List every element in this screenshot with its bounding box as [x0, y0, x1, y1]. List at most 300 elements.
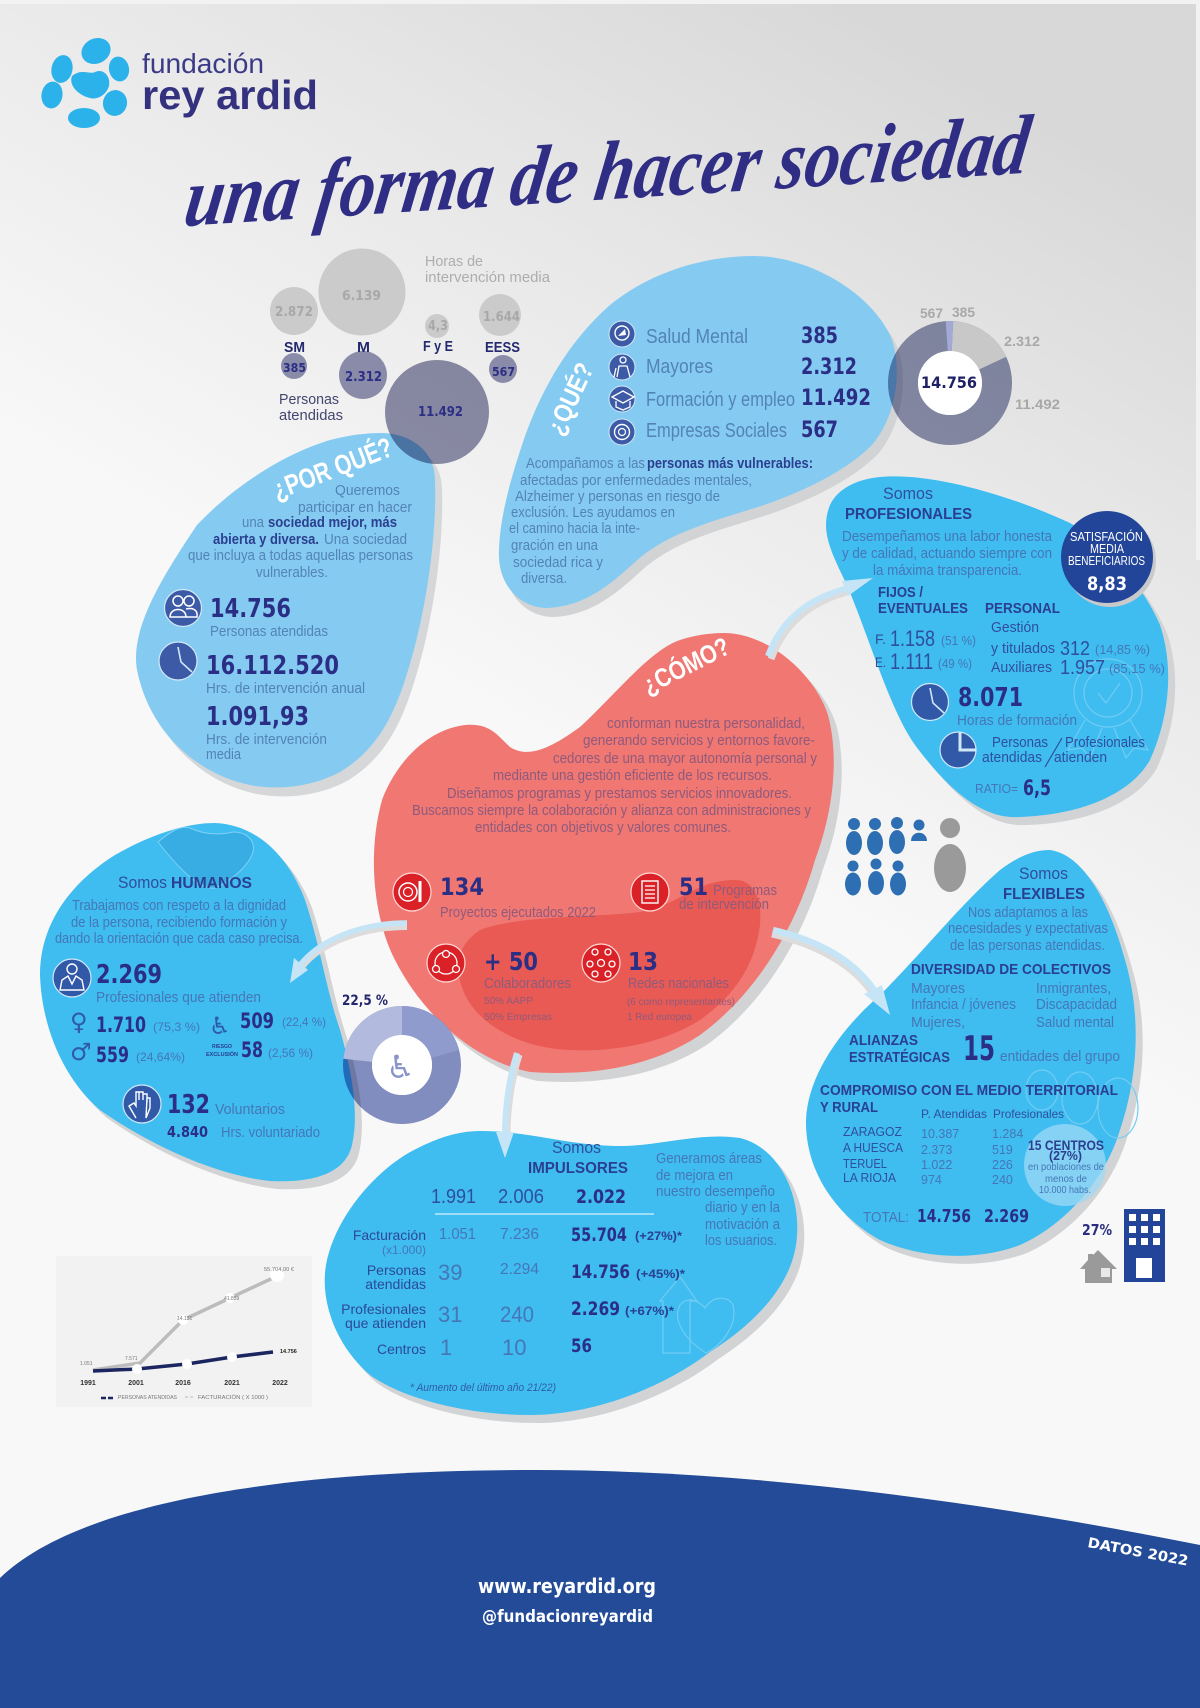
- table: evolution by year: que atienden: [345, 1315, 426, 1331]
- bubble chart: hours and people by area: 2.312: [345, 370, 382, 385]
- stat: women: [70, 1008, 200, 1037]
- panel: flexibles: [806, 850, 1143, 1264]
- stat: alianzas estratégicas: ALIANZAS: [849, 1033, 918, 1049]
- bubble chart: hours and people by area: 1.644: [483, 310, 520, 325]
- text: ratio: Profesionales: [1065, 735, 1145, 751]
- line chart: personas atendidas y facturación: 2022: [272, 1380, 288, 1387]
- icon: colaboradores: [427, 944, 465, 982]
- donut chart: 22,5 % discapacidad: 22,5 %: [342, 993, 388, 1009]
- table: evolution by year: 2.006: [498, 1186, 544, 1208]
- callout: 15 centros: 10.000 habs.: [1039, 1184, 1091, 1196]
- heading: somos flexibles: Somos: [1019, 864, 1068, 883]
- row: mayores: 2.312: [801, 355, 857, 380]
- stat: 2.269 profesionales: 2.269: [96, 960, 162, 990]
- text: humanos description: [55, 898, 303, 947]
- text: por qué description: Queremos: [335, 483, 400, 499]
- text: profesionales description: Desempeñamos una labor honesta: [842, 529, 1053, 545]
- stat: 1.091,93 horas media: 1.091,93: [206, 702, 309, 732]
- stats: personal: PERSONAL: [985, 601, 1060, 617]
- panel: profesionales: [826, 476, 1175, 825]
- line chart: personas atendidas y facturación: 55.704,00 €: [264, 1267, 294, 1273]
- text: cómo description: generando servicios y entornos favore-: [583, 733, 815, 749]
- table: evolution by year: atendidas: [365, 1276, 426, 1292]
- text: cómo description: Diseñamos programas y prestamos servicios innovadores.: [447, 786, 792, 802]
- table: evolution by year: 2.269: [571, 1298, 620, 1320]
- table: evolution by year: 10: [502, 1335, 526, 1360]
- heading: somos impulsores: IMPULSORES: [528, 1160, 628, 1177]
- stats: personal: 312: [1060, 638, 1090, 660]
- heading: somos impulsores: [528, 1138, 628, 1177]
- stat: 16.112.520 horas: [206, 651, 365, 697]
- stats: personal: Auxiliares: [991, 660, 1052, 676]
- line chart: personas atendidas y facturación: 1991: [80, 1380, 96, 1387]
- stat: risk of exclusion: EXCLUSIÓN: [206, 1050, 238, 1058]
- heading: somos flexibles: [1003, 864, 1085, 903]
- stat: 13 redes: 1 Red europea: [627, 1012, 692, 1023]
- list: diversidad de colectivos: Infancia / jóvenes: [911, 997, 1016, 1013]
- text: impulsores description: los usuarios.: [705, 1233, 777, 1249]
- arrow: to flexibles: [772, 930, 890, 1015]
- bubble chart: hours and people by area: intervención media: [425, 270, 551, 286]
- stats: fijos y eventuales: EVENTUALES: [878, 601, 968, 617]
- stat: 14.756 personas: 14.756: [210, 594, 291, 624]
- table: evolution by year: 2.294: [500, 1261, 539, 1278]
- stat: voluntarios: Hrs. voluntariado: [221, 1125, 320, 1141]
- icon: mayores: [609, 354, 635, 380]
- stat: disability: [209, 1009, 326, 1040]
- line chart: personas atendidas y facturación: FACTURACIÓN ( X 1000 ): [198, 1394, 268, 1401]
- table: compromiso territorial: 240: [992, 1173, 1013, 1187]
- bubble chart: hours and people by area: 2.872: [275, 305, 313, 320]
- icon: 27% home and building: 27%: [1082, 1221, 1112, 1239]
- icon: proyectos: [393, 873, 431, 911]
- title: una forma de hacer sociedad: una forma de hacer sociedad: [179, 98, 1038, 245]
- table: evolution by year: 31: [438, 1302, 462, 1327]
- bubble chart: hours and people by area: Horas de: [425, 254, 483, 270]
- logo: fundación rey ardid: rey ardid: [142, 72, 318, 118]
- line chart: personas atendidas y facturación: 41.859: [224, 1296, 240, 1302]
- text: qué description: Acompañamos a las: [526, 456, 645, 472]
- heading: somos profesionales: PROFESIONALES: [845, 506, 972, 523]
- donut chart: personas por área: [903, 304, 1060, 430]
- heading: cómo: ¿CÓMO?: [637, 631, 734, 700]
- badge: satisfacción media beneficiarios: SATISFACIÓN: [1070, 529, 1143, 544]
- donut chart: 22,5 % discapacidad: ♿: [386, 1048, 415, 1086]
- stat: women: (75,3 %): [153, 1020, 200, 1034]
- table: evolution by year: Personas: [367, 1262, 426, 1278]
- row: salud mental: [646, 324, 838, 349]
- badge: satisfacción media beneficiarios: 8,83: [1087, 573, 1127, 595]
- table: compromiso territorial: 519: [992, 1143, 1013, 1157]
- bubble: formación y empleo personas: 11.492: [418, 405, 463, 420]
- stats: personal: (85,15 %): [1109, 661, 1165, 676]
- text: ratio: 6,5: [1023, 776, 1051, 800]
- bubble chart: hours and people by area: 385: [283, 361, 306, 375]
- list: diversidad de colectivos: Discapacidad: [1036, 997, 1117, 1013]
- table: evolution by year: 39: [438, 1260, 462, 1285]
- stat: 134 proyectos: 134: [440, 873, 484, 901]
- text: por qué description: abierta y diversa.: [213, 532, 319, 548]
- heading: por qué: ¿POR QUÉ?: [268, 432, 397, 506]
- stat: men: 559: [96, 1043, 129, 1067]
- donut chart: personas por área: 11.492: [1015, 396, 1060, 412]
- panel: qué: [499, 256, 903, 617]
- text: impulsores description: Generamos áreas: [656, 1151, 762, 1167]
- callout: 15 centros: [1024, 1124, 1106, 1206]
- text: flexibles description: Nos adaptamos a las: [968, 905, 1088, 921]
- stat: disability: (22,4 %): [282, 1015, 326, 1029]
- stat: +50 colaboradores: [484, 947, 571, 1023]
- icon: empresas sociales: [609, 419, 635, 445]
- callout: 15 centros: (27%): [1049, 1148, 1082, 1163]
- stats: personal: y titulados: [991, 641, 1055, 657]
- donut chart: personas por área: 567: [920, 305, 943, 321]
- table: compromiso territorial: 1.284: [992, 1127, 1023, 1141]
- table: compromiso territorial: LA RIOJA: [843, 1170, 896, 1185]
- text: por qué description: participar en hacer: [298, 500, 412, 516]
- text: ratio: Personas: [992, 735, 1048, 751]
- text: flexibles description: de las personas atendidas.: [950, 938, 1105, 954]
- stats: fijos y eventuales: F.: [875, 631, 886, 647]
- stat: women: 1.710: [96, 1013, 146, 1037]
- text: por qué description: una: [242, 515, 265, 531]
- text: ratio: atendidas: [982, 750, 1042, 766]
- stat: 8.071 horas de formación: 8.071: [958, 683, 1023, 713]
- stat: 1.091,93 horas media: Hrs. de intervención: [206, 732, 327, 748]
- heading: somos profesionales: Somos: [883, 484, 933, 503]
- stat: men: (24,64%): [136, 1050, 185, 1064]
- table: evolution by year: [341, 1186, 685, 1360]
- stat: 1.091,93 horas media: media: [206, 747, 242, 763]
- row: mayores: Mayores: [646, 356, 713, 378]
- table: compromiso territorial: 10.387: [921, 1127, 959, 1141]
- stats: fijos y eventuales: (49 %): [938, 656, 972, 671]
- row: empresas sociales: 567: [801, 418, 838, 443]
- callout: 15 centros: menos de: [1045, 1173, 1087, 1185]
- line chart: personas atendidas y facturación: PERSONAS ATENDIDAS: [118, 1395, 178, 1401]
- logo: fundación rey ardid: fundación: [142, 48, 264, 79]
- donut chart: personas por área: 14.756: [921, 373, 977, 392]
- stat: 16.112.520 horas: 16.112.520: [206, 651, 339, 681]
- stat: +50 colaboradores: 50% AAPP: [484, 995, 533, 1007]
- stat: 13 redes: [627, 947, 735, 1023]
- text: humanos description: dando la orientación que cada caso precisa.: [55, 931, 303, 947]
- text: cómo description: entidades con objetivos y valores comunes.: [475, 820, 731, 836]
- table: compromiso territorial: 226: [992, 1158, 1013, 1172]
- table: evolution by year: 240: [500, 1302, 534, 1327]
- stat: 2.269 profesionales: [96, 960, 261, 1006]
- table: evolution by year: 7.236: [500, 1226, 539, 1243]
- icon: formación y empleo: [609, 386, 635, 412]
- icon: redes: [582, 944, 620, 982]
- list: diversidad de colectivos: Mujeres,: [911, 1015, 965, 1031]
- text: qué description: afectadas por enfermedades mentales,: [520, 473, 752, 489]
- heading: somos humanos: [118, 873, 252, 892]
- stat: alianzas estratégicas: entidades del grupo: [1000, 1049, 1120, 1065]
- icon: professional: [53, 959, 91, 997]
- text: por qué description: [188, 483, 413, 581]
- stat: 8.071 horas de formación: [957, 683, 1077, 729]
- text: cómo description: cedores de una mayor autonomía personal y: [553, 751, 818, 767]
- stat: 134 proyectos: [440, 873, 596, 921]
- bubble chart: hours and people by area: [270, 248, 551, 424]
- stat: +50 colaboradores: + 50: [484, 947, 538, 976]
- icon: clock: [159, 642, 197, 680]
- panel: humanos: [40, 823, 362, 1189]
- stat: risk of exclusion: (2,56 %): [268, 1046, 313, 1060]
- callout: 15 centros: 15 CENTROS: [1028, 1137, 1104, 1153]
- stats: fijos y eventuales: (51 %): [941, 633, 976, 648]
- list: diversidad de colectivos: [911, 961, 1117, 1031]
- line chart: personas atendidas y facturación: 2001: [128, 1380, 144, 1387]
- text: humanos description: Trabajamos con respeto a la dignidad: [72, 898, 286, 914]
- text: por qué description: vulnerables.: [256, 565, 328, 581]
- row: formación y empleo: Formación y empleo: [646, 389, 795, 411]
- table: evolution by year: 1: [440, 1335, 452, 1360]
- list: diversidad de colectivos: Salud mental: [1036, 1015, 1114, 1031]
- table: evolution by year: (x1.000): [382, 1243, 426, 1257]
- table: compromiso territorial: [820, 1082, 1118, 1227]
- list: diversidad de colectivos: Inmigrantes,: [1036, 981, 1111, 997]
- table: compromiso territorial: TERUEL: [843, 1156, 887, 1171]
- donut chart: personas por área: 2.312: [1004, 333, 1040, 349]
- stats: fijos y eventuales: 1.158: [890, 626, 935, 651]
- text: cómo description: Buscamos siempre la colaboración y alianza con administraciones y: [412, 803, 812, 819]
- stat: risk of exclusion: RIESGO: [212, 1044, 233, 1050]
- stat: 51 programas: Programas: [713, 883, 777, 899]
- logo: fundación rey ardid: [39, 33, 318, 128]
- table: evolution by year: (+67%)*: [625, 1304, 674, 1318]
- text: impulsores description: motivación a: [705, 1217, 781, 1233]
- table: compromiso territorial: Profesionales: [993, 1107, 1064, 1121]
- table: compromiso territorial: TOTAL:: [863, 1209, 909, 1226]
- bubble chart: hours and people by area: atendidas: [279, 408, 343, 424]
- stat: 51 programas: [679, 873, 777, 913]
- heading: somos humanos: Somos: [118, 873, 167, 892]
- table: evolution by year: 1.991: [431, 1186, 476, 1208]
- stat: risk of exclusion: 58: [241, 1038, 263, 1062]
- text: qué description: gración en una: [511, 538, 599, 554]
- text: por qué description: sociedad mejor, más: [268, 515, 397, 531]
- stat: voluntarios: Voluntarios: [215, 1102, 285, 1118]
- table: evolution by year: 56: [571, 1335, 592, 1357]
- panel: por qué: [136, 432, 442, 796]
- footer: website: www.reyardid.org: [478, 1574, 656, 1598]
- stats: personal: (14,85 %): [1095, 642, 1150, 657]
- text: qué description: personas más vulnerables:: [647, 456, 813, 472]
- footer band: [0, 1470, 1200, 1708]
- line chart: personas atendidas y facturación: 14.131: [177, 1316, 193, 1322]
- table: compromiso territorial: A HUESCA: [843, 1140, 903, 1155]
- icon: 27% home and building: [1080, 1209, 1165, 1283]
- table: evolution by year: Profesionales: [341, 1301, 426, 1317]
- text: qué description: el camino hacia la inte-: [509, 521, 640, 537]
- stat: alianzas estratégicas: ESTRATÉGICAS: [849, 1049, 950, 1066]
- text: qué description: diversa.: [521, 571, 567, 587]
- text: impulsores description: nuestro desempeño: [656, 1184, 775, 1200]
- text: ratio: [975, 735, 1145, 800]
- text: cómo description: [412, 716, 818, 836]
- stat: 1.091,93 horas media: [206, 702, 327, 763]
- bubble chart: hours and people by area: M: [357, 339, 370, 356]
- text: ratio: atienden: [1054, 750, 1107, 766]
- arrow: to humanos: [290, 923, 407, 983]
- footer: datos 2022: DATOS 2022: [1086, 1535, 1189, 1570]
- stat: 2.269 profesionales: Profesionales que atienden: [96, 990, 261, 1006]
- table: evolution by year: Centros: [377, 1341, 426, 1357]
- text: impulsores description: [656, 1151, 781, 1249]
- line chart: personas atendidas y facturación: 2021: [224, 1380, 240, 1387]
- table: evolution by year: Facturación: [353, 1227, 426, 1243]
- icon: balloons watermark: [1026, 1070, 1138, 1138]
- bubble chart: hours and people by area: 4,3: [428, 319, 448, 334]
- icon: salud mental: [609, 321, 635, 347]
- list: diversidad de colectivos: DIVERSIDAD DE COLECTIVOS: [911, 961, 1111, 978]
- table: compromiso territorial: 2.373: [921, 1143, 952, 1157]
- donut chart: personas por área: 385: [952, 304, 975, 320]
- text: qué description: Alzheimer y personas en riesgo de: [515, 489, 720, 505]
- bubble chart: hours and people by area: 6.139: [342, 289, 381, 304]
- stats: fijos y eventuales: E.: [875, 654, 886, 670]
- stats: personal: Gestión: [991, 620, 1039, 636]
- text: impulsores description: diario y en la: [705, 1200, 781, 1216]
- stat: voluntarios: 4.840: [167, 1123, 208, 1141]
- table: evolution by year: 1.051: [439, 1226, 476, 1243]
- stat: 14.756 personas: Personas atendidas: [210, 624, 328, 640]
- text: flexibles description: necesidades y expectativas: [948, 921, 1108, 937]
- table: evolution by year: 55.704: [571, 1224, 627, 1246]
- arrow: to impulsores: [496, 1053, 520, 1158]
- text: impulsores description: de mejora en: [656, 1168, 733, 1184]
- table: compromiso territorial: 974: [921, 1173, 942, 1187]
- line chart: personas atendidas y facturación: 7.571: [125, 1356, 138, 1362]
- text: ratio: RATIO=: [975, 781, 1018, 796]
- stat: alianzas estratégicas: 15: [963, 1029, 995, 1069]
- text: cómo description: conforman nuestra personalidad,: [607, 716, 805, 732]
- heading: somos impulsores: Somos: [552, 1138, 601, 1157]
- icon: pie: [940, 732, 976, 768]
- stat: 134 proyectos: Proyectos ejecutados 2022: [440, 905, 596, 921]
- text: qué description: [509, 456, 813, 587]
- text: por qué description: que incluya a todas aquellas personas: [188, 548, 413, 564]
- stat: 16.112.520 horas: Hrs. de intervención anual: [206, 681, 365, 697]
- bubble chart: hours and people by area: Personas: [279, 392, 339, 408]
- stat: 13 redes: Redes nacionales: [628, 976, 729, 992]
- table: compromiso territorial: COMPROMISO CON EL MEDIO TERRITORIAL: [820, 1082, 1118, 1099]
- text: profesionales description: y de calidad, actuando siempre con: [842, 546, 1052, 562]
- text: flexibles description: [948, 905, 1108, 954]
- arrow: to profesionales: [768, 578, 873, 659]
- text: humanos description: de la persona, recibiendo formación y: [71, 915, 288, 931]
- stat: men: ♂: [70, 1038, 92, 1066]
- stat: +50 colaboradores: Colaboradores: [484, 976, 571, 992]
- stat: 8.071 horas de formación: Horas de formación: [957, 713, 1077, 729]
- stat: 51 programas: de intervención: [679, 897, 769, 913]
- stats: fijos y eventuales: FIJOS /: [878, 585, 923, 601]
- badge: satisfacción media beneficiarios: [1061, 511, 1156, 607]
- badge: satisfacción media beneficiarios: BENEFICIARIOS: [1068, 554, 1145, 568]
- stat: men: [70, 1038, 185, 1067]
- icon: medal watermark: [1068, 659, 1148, 758]
- table: evolution by year: 14.756: [571, 1261, 630, 1283]
- footnote: * Aumento del último año 21/22): [410, 1382, 556, 1394]
- heading: somos humanos: HUMANOS: [171, 875, 252, 892]
- icon group: people diversity: [845, 817, 966, 896]
- table: evolution by year: (+27%)*: [635, 1229, 682, 1243]
- line chart: personas atendidas y facturación: [56, 1256, 312, 1407]
- stat: alianzas estratégicas: [849, 1029, 1120, 1069]
- stats: fijos y eventuales: 1.111: [890, 649, 933, 674]
- bubble: formación y empleo personas: [385, 360, 489, 464]
- badge: satisfacción media beneficiarios: MEDIA: [1090, 542, 1125, 556]
- callout: 15 centros: en poblaciones de: [1028, 1161, 1104, 1173]
- stats: personal: [985, 601, 1165, 679]
- bubble chart: hours and people by area: EESS: [485, 339, 520, 356]
- text: qué description: exclusión. Les ayudamos en: [511, 505, 675, 521]
- donut chart: 22,5 % discapacidad: [342, 993, 459, 1110]
- table: compromiso territorial: Y RURAL: [820, 1099, 878, 1116]
- stat: 51 programas: 51: [679, 873, 708, 901]
- text: profesionales description: [842, 529, 1053, 579]
- text: profesionales description: la máxima transparencia.: [873, 563, 1022, 579]
- text: por qué description: Una sociedad: [324, 532, 407, 548]
- row: empresas sociales: Empresas Sociales: [646, 420, 787, 442]
- bubble chart: hours and people by area: 567: [492, 365, 515, 379]
- table: evolution by year: 2.022: [576, 1186, 626, 1208]
- line chart: personas atendidas y facturación: 1.051: [80, 1361, 93, 1367]
- table: compromiso territorial: 1.022: [921, 1158, 952, 1172]
- table: compromiso territorial: ZARAGOZ: [843, 1124, 902, 1139]
- table: compromiso territorial: P. Atendidas: [921, 1107, 987, 1121]
- icon: clock: [912, 684, 948, 720]
- icon: house and heart watermark: [660, 1277, 734, 1353]
- table: evolution by year: (+45%)*: [636, 1267, 685, 1281]
- line chart: personas atendidas y facturación: 2016: [175, 1380, 191, 1387]
- stat: 13 redes: (6 como representantes): [627, 997, 735, 1008]
- table: compromiso territorial: 14.756: [917, 1206, 971, 1227]
- stat: risk of exclusion: [206, 1038, 313, 1062]
- icon: hands watermark: [158, 827, 253, 888]
- icon: programas: [631, 873, 669, 911]
- row: mayores: [646, 355, 857, 380]
- heading: somos profesionales: [845, 484, 972, 523]
- stat: disability: 509: [240, 1009, 274, 1033]
- icon: people: [164, 590, 202, 626]
- row: formación y empleo: 11.492: [801, 386, 871, 411]
- stat: 13 redes: 13: [628, 947, 658, 976]
- row: salud mental: Salud Mental: [646, 326, 748, 348]
- panel: impulsores: [325, 1131, 804, 1423]
- panel: cómo: [374, 631, 842, 1082]
- bubble chart: hours and people by area: F y E: [423, 338, 453, 355]
- icon: hand: [123, 1085, 161, 1123]
- text: cómo description: mediante una gestión eficiente de los recursos.: [493, 768, 772, 784]
- bubble chart: hours and people by area: SM: [284, 339, 305, 356]
- stat: women: ♀: [70, 1008, 88, 1036]
- list: diversidad de colectivos: Mayores: [911, 981, 965, 997]
- row: salud mental: 385: [801, 324, 838, 349]
- text: qué description: sociedad rica y: [513, 555, 604, 571]
- heading: somos flexibles: FLEXIBLES: [1003, 886, 1085, 903]
- line chart: personas atendidas y facturación: 14.756: [280, 1349, 297, 1355]
- heading: qué: ¿QUÉ?: [540, 358, 600, 440]
- stat: 14.756 personas: [210, 594, 328, 640]
- table: compromiso territorial: 2.269: [984, 1206, 1029, 1227]
- stat: voluntarios: [167, 1090, 320, 1141]
- stats: fijos y eventuales: [875, 585, 976, 674]
- stat: +50 colaboradores: 50% Empresas: [484, 1011, 552, 1023]
- stat: voluntarios: 132: [167, 1090, 210, 1120]
